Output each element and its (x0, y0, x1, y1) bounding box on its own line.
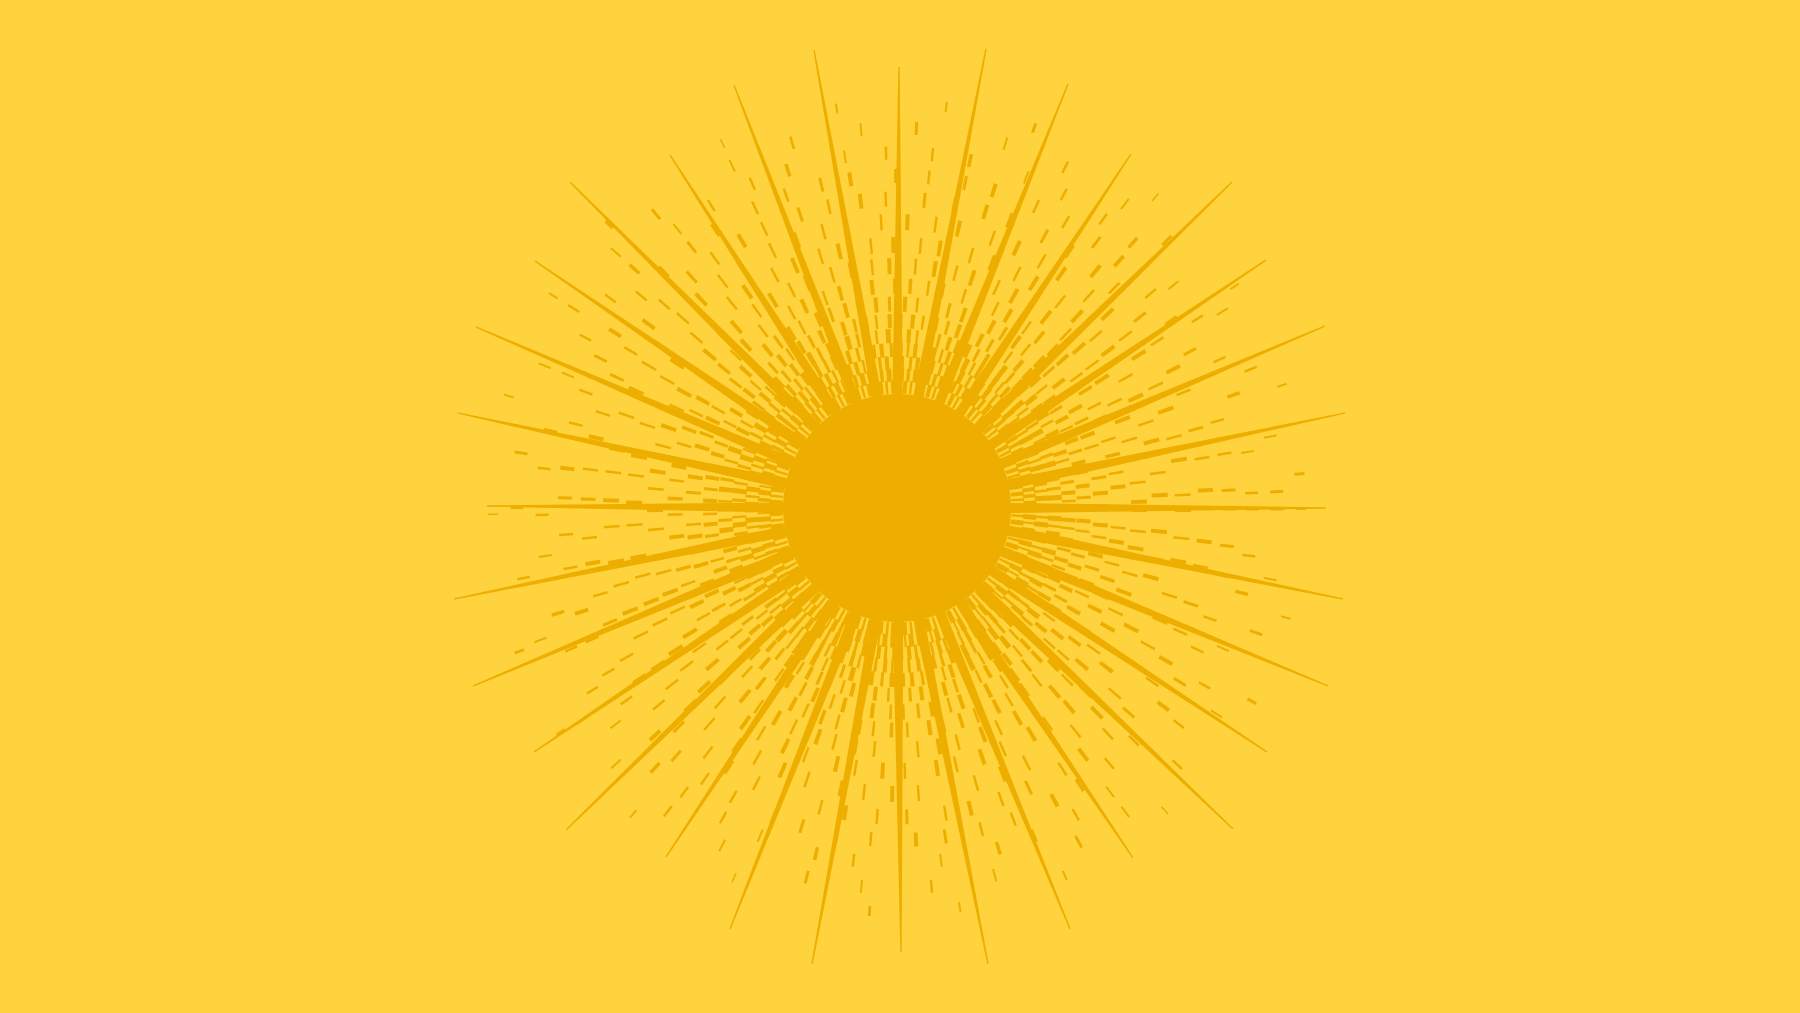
sun rays (454, 49, 1345, 964)
sun disc (783, 394, 1011, 622)
radial dashes between rays (493, 104, 1301, 912)
